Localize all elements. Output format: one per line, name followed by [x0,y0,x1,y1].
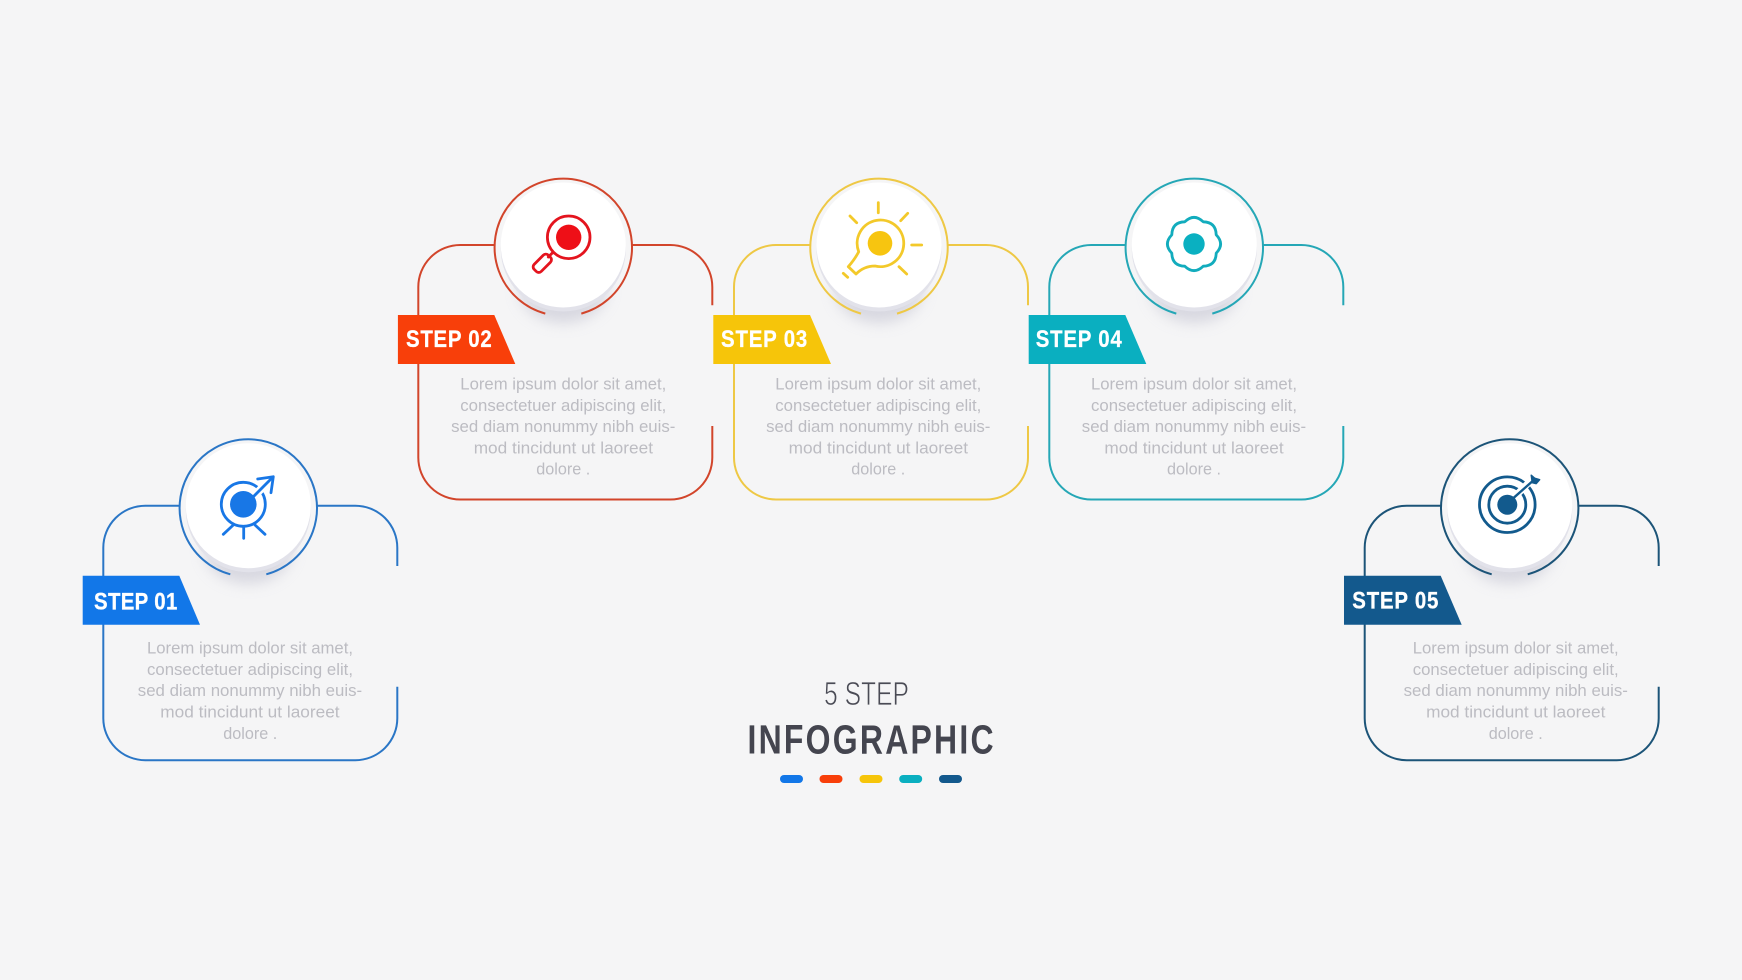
body text: Lorem ipsum dolor sit amet, [1413,639,1619,658]
body text: mod tincidunt ut laoreet [1426,703,1606,722]
body text: dolore . [223,724,277,743]
body text: mod tincidunt ut laoreet [1104,438,1284,457]
body text: sed diam nonummy nibh euis- [138,681,362,700]
body text: consectetuer adipiscing elit, [147,660,353,679]
box outline [734,245,1028,500]
body text: dolore . [1489,724,1543,743]
body text [1404,639,1628,743]
body text: mod tincidunt ut laoreet [160,703,340,722]
body text: dolore . [1167,460,1221,479]
circle badge [1126,179,1263,323]
body text: Lorem ipsum dolor sit amet, [1091,374,1297,394]
icon: magnifying glass [532,216,590,274]
body text: consectetuer adipiscing elit, [1091,396,1297,415]
step tag: STEP 02 [406,326,492,353]
body text: sed diam nonummy nibh euis- [1404,681,1628,700]
body text: Lorem ipsum dolor sit amet, [147,639,353,658]
step tag: STEP 05 [1352,587,1438,614]
body text: sed diam nonummy nibh euis- [1082,417,1306,436]
panel: step 02 [398,179,712,500]
step tag [398,315,515,364]
circle badge [180,439,317,584]
step tag [83,576,200,625]
icon: target with arrow [221,477,273,538]
box outline [103,506,397,760]
icon: bullseye with arrow [1480,475,1540,532]
icon: light bulb [843,203,922,277]
step tag [1029,315,1146,364]
body text: Lorem ipsum dolor sit amet, [775,374,981,394]
body text: consectetuer adipiscing elit, [1413,660,1619,679]
panel: step 05 [1344,439,1659,760]
body text [766,374,990,479]
subtitle: 5 step: 5 STEP [824,675,909,712]
body text: mod tincidunt ut laoreet [789,438,968,457]
step tag [713,315,831,364]
step tag [1344,576,1462,625]
body text: sed diam nonummy nibh euis- [766,417,990,436]
heading: infographic: INFOGRAPHIC [748,717,994,762]
body text: consectetuer adipiscing elit, [775,396,981,415]
body text: sed diam nonummy nibh euis- [451,417,675,436]
step tag: STEP 01 [94,588,177,615]
step tag: STEP 04 [1036,326,1122,353]
body text [1082,374,1306,479]
body text [451,374,675,479]
title [748,675,994,783]
box outline [1365,506,1659,760]
circle badge [1441,439,1578,584]
panel: step 03 [713,179,1028,500]
body text: mod tincidunt ut laoreet [474,438,653,457]
circle badge [810,179,948,323]
box outline [1049,245,1343,500]
step tag: STEP 03 [721,326,807,353]
body text: dolore . [851,460,905,479]
body text: Lorem ipsum dolor sit amet, [460,374,666,394]
icon: gear [1167,217,1221,271]
circle badge [495,179,632,323]
box outline [418,245,712,500]
panel: step 04 [1029,179,1343,500]
colour key dots [780,775,962,783]
body text [138,639,362,743]
body text: consectetuer adipiscing elit, [460,396,666,415]
body text: dolore . [536,460,590,479]
panel: step 01 [83,439,397,760]
